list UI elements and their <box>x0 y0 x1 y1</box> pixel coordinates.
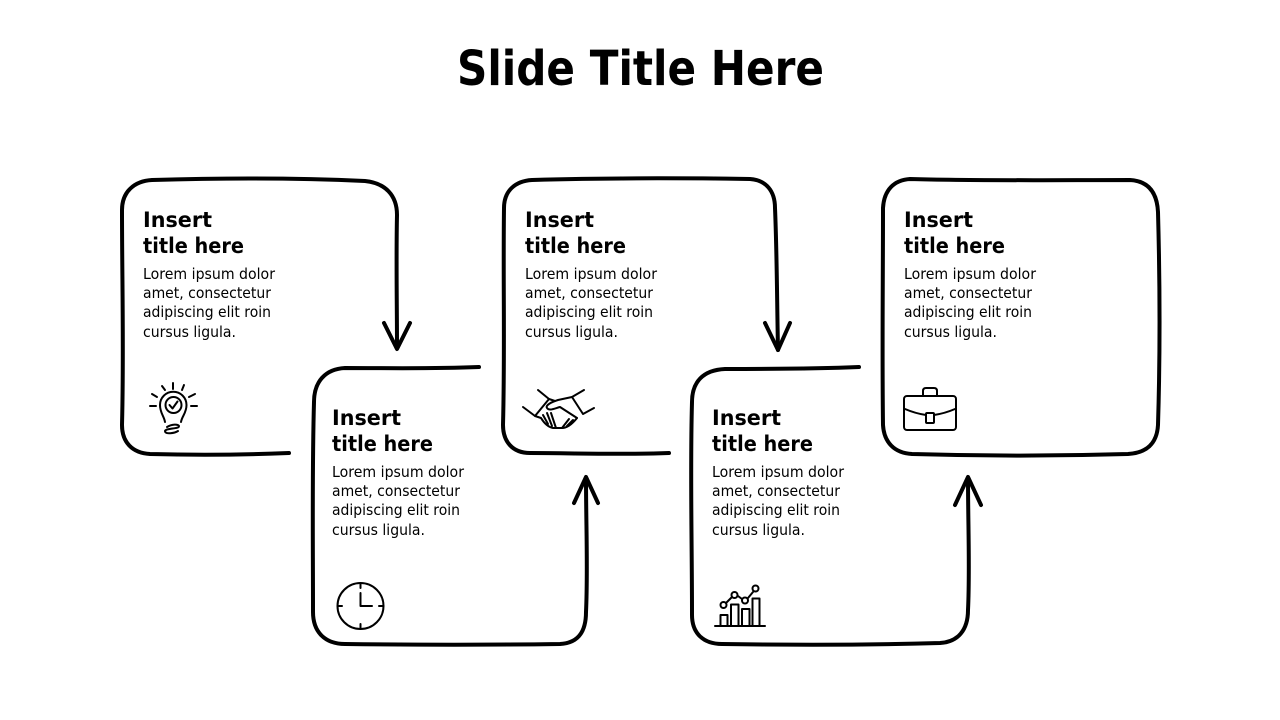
panel: step 4 <box>691 367 981 645</box>
text block: step 5: cursus ligula. <box>904 323 997 341</box>
heading: step 1: title here <box>143 234 244 258</box>
text block: step 1 <box>143 265 276 341</box>
text block: step 3: adipiscing elit roin <box>525 303 653 321</box>
text block: step 4: cursus ligula. <box>712 521 805 539</box>
text block: step 1: adipiscing elit roin <box>143 303 271 321</box>
heading: step 1: Insert <box>143 208 212 232</box>
heading: step 4: Insert <box>712 406 781 430</box>
heading: step 1 <box>143 208 244 258</box>
text block: step 2: amet, consectetur <box>332 482 461 500</box>
arrow outline: step 4 <box>691 367 981 645</box>
heading: step 5 <box>904 208 1005 258</box>
text block: step 2: cursus ligula. <box>332 521 425 539</box>
text block: step 3: amet, consectetur <box>525 284 654 302</box>
text block: step 4: adipiscing elit roin <box>712 501 840 519</box>
text block: step 3: Lorem ipsum dolor <box>525 265 658 283</box>
icon: handshake <box>523 390 594 428</box>
card outline: step 5 <box>883 179 1160 456</box>
text block: step 5: Lorem ipsum dolor <box>904 265 1037 283</box>
text block: step 1: cursus ligula. <box>143 323 236 341</box>
heading: step 2: title here <box>332 432 433 456</box>
arrow outline: step 3 <box>503 178 790 454</box>
heading: step 5: title here <box>904 234 1005 258</box>
text block: step 2: adipiscing elit roin <box>332 501 460 519</box>
text block: step 3: cursus ligula. <box>525 323 618 341</box>
title: Slide Title Here <box>457 41 824 97</box>
text block: step 4: amet, consectetur <box>712 482 841 500</box>
text block: step 1: Lorem ipsum dolor <box>143 265 276 283</box>
heading: step 3: title here <box>525 234 626 258</box>
icon: briefcase <box>904 388 956 430</box>
text block: step 5: adipiscing elit roin <box>904 303 1032 321</box>
heading: step 2: Insert <box>332 406 401 430</box>
icon: bar and line chart <box>715 586 765 626</box>
heading: step 3: Insert <box>525 208 594 232</box>
text block: step 3 <box>525 265 658 341</box>
panel: step 5 <box>883 179 1160 456</box>
icon: light bulb <box>150 383 197 433</box>
heading: step 5: Insert <box>904 208 973 232</box>
arrow outline: step 1 <box>122 179 410 455</box>
arrow outline: step 2 <box>313 367 598 645</box>
text block: step 5: amet, consectetur <box>904 284 1033 302</box>
panel: step 2 <box>313 367 598 645</box>
panel: step 3 <box>503 178 790 454</box>
heading: step 4: title here <box>712 432 813 456</box>
heading: step 4 <box>712 406 813 456</box>
icon: clock <box>338 583 384 629</box>
panel: step 1 <box>122 179 410 455</box>
heading: step 3 <box>525 208 626 258</box>
text block: step 1: amet, consectetur <box>143 284 272 302</box>
text block: step 2 <box>332 463 465 539</box>
heading: step 2 <box>332 406 433 456</box>
text block: step 4 <box>712 463 845 539</box>
text block: step 5 <box>904 265 1037 341</box>
text block: step 4: Lorem ipsum dolor <box>712 463 845 481</box>
text block: step 2: Lorem ipsum dolor <box>332 463 465 481</box>
